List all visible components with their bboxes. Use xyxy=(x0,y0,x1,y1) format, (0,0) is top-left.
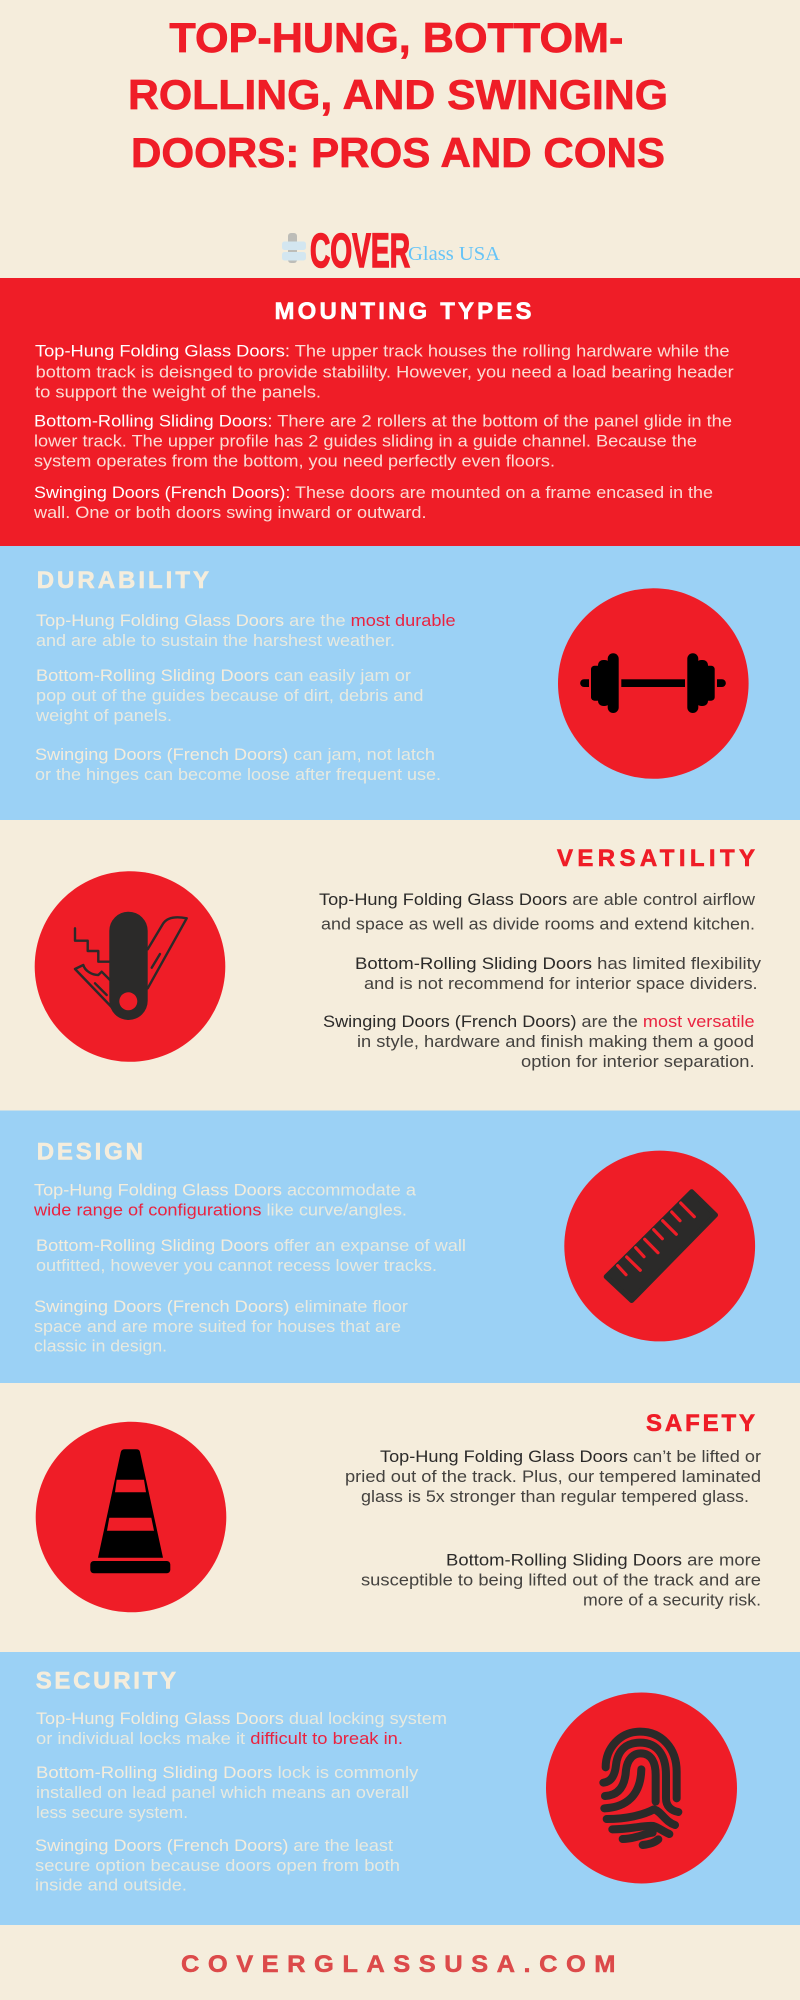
text: swinging versatility xyxy=(323,1013,755,1071)
text: bottom-rolling security: Bottom-Rolling Sliding Doors lock is commonly xyxy=(36,1764,419,1782)
text: bottom-rolling safety xyxy=(361,1552,761,1609)
text: top-hung versatility: and space as well as divide rooms and extend kitchen. xyxy=(321,915,755,933)
text: top-hung safety xyxy=(345,1448,762,1506)
text: bottom-rolling mounting xyxy=(34,412,732,470)
text: top-hung mounting: Top-Hung Folding Glass Doors: The upper track houses the rolling hardware while the xyxy=(35,342,730,360)
text: bottom-rolling design: outfitted, however you cannot recess lower tracks. xyxy=(36,1257,437,1275)
text: swinging durability xyxy=(35,746,441,784)
logo wordmark: COVER xyxy=(310,225,410,278)
heading: safety: SAFETY xyxy=(646,1410,755,1437)
text: top-hung design: Top-Hung Folding Glass Doors accommodate a xyxy=(34,1181,417,1199)
text: bottom-rolling mounting: system operates from the bottom, you need perfectly even floors. xyxy=(34,452,555,470)
text: top-hung mounting xyxy=(35,342,734,402)
heading: versatility: VERSATILITY xyxy=(557,845,755,872)
icon: glass panels logo mark xyxy=(282,233,306,263)
text: swinging versatility: Swinging Doors (French Doors) are the most versatile xyxy=(323,1013,755,1031)
text: bottom-rolling security: installed on lead panel which means an overall xyxy=(36,1784,409,1802)
text: top-hung design xyxy=(33,1181,417,1219)
text: swinging security: Swinging Doors (French Doors) are the least xyxy=(35,1837,393,1855)
text: top-hung security: or individual locks make it difficult to break in. xyxy=(36,1730,403,1748)
text: swinging security: inside and outside. xyxy=(35,1877,187,1895)
text: bottom-rolling versatility xyxy=(355,955,762,993)
text: swinging durability: Swinging Doors (French Doors) can jam, not latch xyxy=(35,746,435,764)
panel: safety xyxy=(0,1383,800,1652)
text: swinging versatility: in style, hardware and finish making them a good xyxy=(357,1033,754,1051)
heading: durability: DURABILITY xyxy=(37,567,209,594)
title: ROLLING, AND SWINGING xyxy=(128,71,668,118)
text: swinging durability: or the hinges can become loose after frequent use. xyxy=(35,766,441,784)
heading: mounting types: MOUNTING TYPES xyxy=(274,298,532,325)
text: bottom-rolling safety: Bottom-Rolling Sliding Doors are more xyxy=(446,1552,761,1570)
text: bottom-rolling durability: Bottom-Rolling Sliding Doors can easily jam or xyxy=(36,667,412,685)
icon: fingerprint in red circle xyxy=(546,1692,737,1884)
text: bottom-rolling safety: susceptible to being lifted out of the track and are xyxy=(361,1571,761,1589)
text: top-hung safety: pried out of the track. Plus, our tempered laminated xyxy=(345,1468,761,1486)
logo wordmark: Glass USA xyxy=(408,243,501,265)
text: swinging design: space and are more suited for houses that are xyxy=(34,1318,401,1336)
text: swinging security: secure option because doors open from both xyxy=(35,1857,400,1875)
text: bottom-rolling design: Bottom-Rolling Sliding Doors offer an expanse of wall xyxy=(36,1237,466,1255)
text: top-hung versatility: Top-Hung Folding Glass Doors are able control airflow xyxy=(319,891,755,909)
text: swinging design: classic in design. xyxy=(34,1338,167,1356)
text: bottom-rolling durability: pop out of the guides because of dirt, debris and xyxy=(36,687,423,705)
icon: dumbbell in red circle xyxy=(558,588,749,779)
text: top-hung durability xyxy=(36,612,456,650)
panel: mounting types xyxy=(0,278,800,546)
text: bottom-rolling security: less secure system. xyxy=(36,1804,188,1822)
text: top-hung design: wide range of configurations like curve/angles. xyxy=(33,1201,407,1219)
heading: design: DESIGN xyxy=(37,1139,143,1166)
text: bottom-rolling design xyxy=(36,1237,466,1275)
title: TOP-HUNG, BOTTOM- xyxy=(169,14,623,61)
title: DOORS: PROS AND CONS xyxy=(131,129,665,176)
panel: design xyxy=(0,1110,800,1383)
title xyxy=(128,14,668,176)
footer: website: COVERGLASSUSA.COM xyxy=(181,1951,624,1978)
text: top-hung security: Top-Hung Folding Glass Doors dual locking system xyxy=(36,1710,447,1728)
text: swinging security xyxy=(35,1837,400,1895)
text: top-hung durability: Top-Hung Folding Glass Doors are the most durable xyxy=(36,612,456,630)
text: bottom-rolling durability xyxy=(35,667,423,725)
panel: durability xyxy=(0,546,800,820)
text: bottom-rolling versatility: Bottom-Rolling Sliding Doors has limited flexibility xyxy=(355,955,762,973)
text: top-hung mounting: bottom track is deisnged to provide stabililty. However, you need a load bearing header xyxy=(36,364,734,382)
text: swinging design xyxy=(34,1298,409,1356)
text: swinging versatility: option for interior separation. xyxy=(521,1053,755,1071)
text: bottom-rolling mounting: lower track. The upper profile has 2 guides sliding in a guide channel. Because the xyxy=(34,432,697,450)
text: top-hung safety: glass is 5x stronger than regular tempered glass. xyxy=(361,1488,749,1506)
text: bottom-rolling versatility: and is not recommend for interior space dividers. xyxy=(364,975,758,993)
panel: security xyxy=(0,1652,800,1925)
logo: Cover Glass USA xyxy=(282,225,501,278)
text: top-hung versatility xyxy=(319,891,755,933)
text: swinging mounting: Swinging Doors (French Doors): These doors are mounted on a frame encased in the xyxy=(34,484,713,502)
icon: ruler in red circle xyxy=(564,1151,755,1341)
heading: security: SECURITY xyxy=(36,1668,176,1695)
text: top-hung safety: Top-Hung Folding Glass Doors can’t be lifted or xyxy=(380,1448,762,1466)
panel: versatility xyxy=(0,820,800,1110)
text: top-hung mounting: to support the weight of the panels. xyxy=(35,384,321,402)
text: swinging mounting xyxy=(33,484,713,522)
text: bottom-rolling durability: weight of panels. xyxy=(35,707,172,725)
text: bottom-rolling safety: more of a security risk. xyxy=(583,1591,761,1609)
text: top-hung durability: and are able to sustain the harshest weather. xyxy=(36,632,395,650)
text: swinging mounting: wall. One or both doors swing inward or outward. xyxy=(33,504,427,522)
icon: traffic cone in red circle xyxy=(36,1422,226,1612)
icon: pocket knife in red circle xyxy=(35,871,225,1062)
text: top-hung security xyxy=(36,1710,447,1748)
text: swinging design: Swinging Doors (French Doors) eliminate floor xyxy=(34,1298,409,1316)
text: bottom-rolling mounting: Bottom-Rolling Sliding Doors: There are 2 rollers at the bottom of the panel glide in the xyxy=(34,412,732,430)
text: bottom-rolling security xyxy=(36,1764,419,1822)
